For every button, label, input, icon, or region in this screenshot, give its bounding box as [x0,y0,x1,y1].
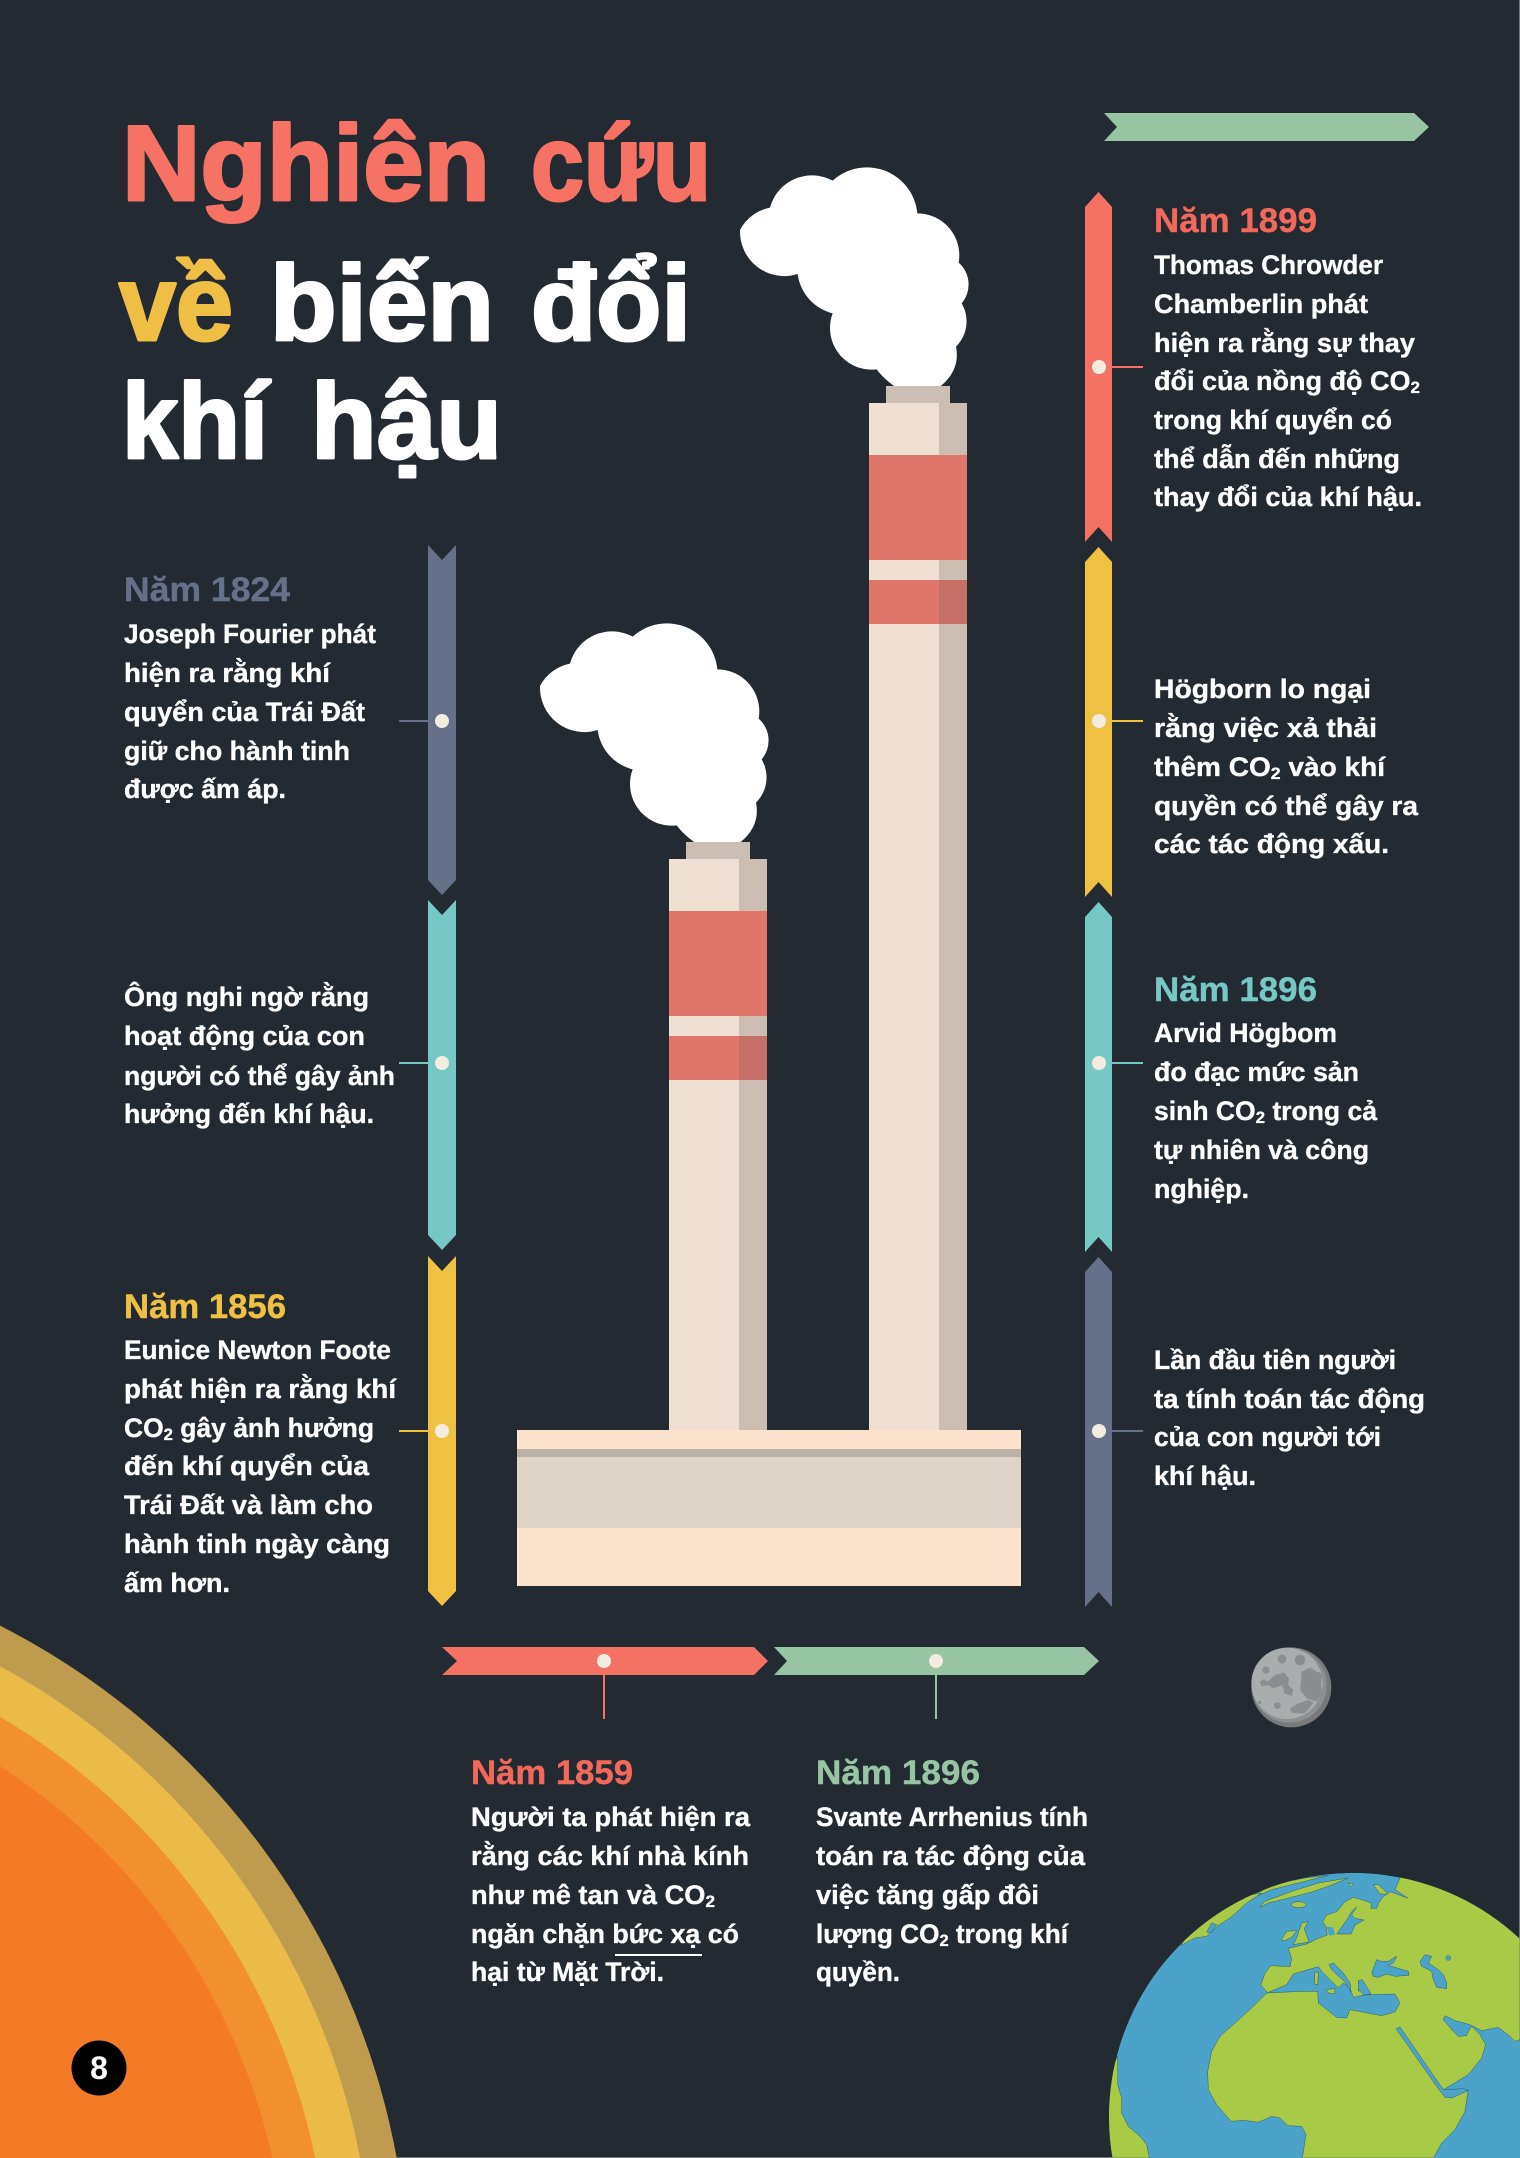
text block: ta tính toán tác động [1154,1384,1425,1414]
page number: 8 [90,2050,108,2086]
text block: rằng việc xả thải [1154,712,1377,743]
text block: thêm CO [1154,752,1267,782]
ribbon [1085,192,1112,542]
smoke: right chimney [740,167,969,387]
year heading: Năm 1824 [124,571,290,609]
title: Nghiên [122,103,490,223]
title: đổi [531,243,691,363]
text block: Joseph Fourier phát [124,619,376,649]
year heading: Năm 1899 [1154,202,1317,240]
connector [1112,1430,1143,1432]
text block: giữ cho hành tinh [124,736,350,766]
panel: 1859 [442,1647,768,1987]
year heading: Năm 1859 [471,1754,633,1792]
connector [935,1675,937,1719]
text block: 2 [1411,378,1420,397]
text block: đổi của nồng độ CO [1154,366,1410,396]
text block: Lần đầu tiên người [1154,1345,1396,1375]
dot [1092,1424,1106,1438]
text block [124,1335,398,1598]
text block: của con người tới [1154,1422,1381,1452]
title: hậu [311,361,502,481]
text block: 2 [164,1425,173,1444]
text block: Svante Arrhenius tính [816,1802,1088,1832]
text block: các tác động xấu. [1154,829,1389,859]
panel: human activity doubt [124,900,456,1250]
text block: hại từ Mặt Trời. [471,1957,664,1987]
text block: toán ra tác động của [816,1841,1086,1871]
title: khí [122,361,271,481]
connector [1112,1062,1143,1064]
text block: gây ảnh hưởng [173,1413,374,1443]
text block: việc tăng gấp đôi [816,1880,1039,1910]
text block: hoạt động của con [124,1021,365,1051]
icon: earth [1107,1870,1520,2158]
right chimney [869,386,967,1430]
text block: quyền. [816,1957,900,1987]
text block: Eunice Newton Foote [124,1335,391,1365]
left chimney [669,842,767,1430]
text block: thể dẫn đến những [1154,443,1400,474]
ribbon [428,900,456,1250]
text block: Người ta phát hiện ra [471,1802,751,1832]
panel: first calculation [1085,1257,1425,1607]
dot [597,1654,611,1668]
ribbon [1085,1257,1112,1607]
text block: Ông nghi ngờ rằng [124,981,369,1012]
dot [435,1424,449,1438]
ribbon [774,1647,1099,1675]
panel: 1824 [124,545,456,895]
text block: khí hậu. [1154,1461,1256,1491]
text block: ngăn chặn bức xạ có [471,1919,739,1949]
text block: 2 [939,1931,949,1950]
connector [399,720,428,722]
dot [435,1056,449,1070]
text block: CO [124,1413,164,1443]
text block: Arvid Högbom [1154,1018,1337,1048]
ribbon [428,1256,456,1606]
connector [603,1675,605,1719]
text block: 2 [1271,764,1281,783]
panel: 1896 Högbom [1085,902,1378,1252]
dot [929,1654,943,1668]
text block: trong khí [949,1919,1069,1949]
text block [1154,1018,1378,1204]
text block: hành tinh ngày càng [124,1529,390,1559]
title: về [119,243,233,363]
text block: hiện ra rằng sự thay [1154,327,1415,358]
connector [399,1430,428,1432]
text block: đến khí quyển của [124,1451,370,1481]
text block: trong khí quyển có [1154,405,1392,435]
title [119,103,711,481]
text block: như mê tan và CO [471,1880,704,1910]
panel: Högborn concern [1085,547,1419,897]
text block: vào khí [1281,752,1387,782]
text block: đo đạc mức sản [1154,1057,1359,1087]
smoke: left chimney [540,623,769,843]
text block: ấm hơn. [124,1568,230,1598]
text block: Chamberlin phát [1154,289,1368,319]
text block [1154,250,1422,512]
top ribbon [1104,113,1429,141]
text block: sinh CO [1154,1096,1258,1126]
connector [399,1062,428,1064]
text block [816,1802,1088,1987]
text block: Högborn lo ngại [1154,674,1371,704]
ribbon [1085,547,1112,897]
text block: 2 [705,1892,715,1911]
text block [124,619,376,804]
text block: thay đổi của khí hậu. [1154,482,1422,512]
ribbon [1085,902,1112,1252]
connector [1112,720,1143,722]
page number [72,2040,126,2096]
panel: 1899 [1085,192,1422,542]
icon: sun [0,1626,397,2158]
text block [1154,1345,1425,1491]
title: cứu [531,103,711,223]
text block: hưởng đến khí hậu. [124,1099,374,1129]
text block: Thomas Chrowder [1154,250,1383,280]
text block [124,981,395,1129]
text block: phát hiện ra rằng khí [124,1373,398,1404]
text block [1154,674,1419,859]
dot [1092,714,1106,728]
dot [1092,360,1106,374]
icon: moon [1251,1647,1331,1727]
text block: tự nhiên và công [1154,1135,1369,1165]
text block: 2 [1256,1108,1265,1127]
text block: trong cả [1265,1096,1378,1126]
panel: 1856 [124,1256,456,1606]
text block: hiện ra rằng khí [124,657,332,688]
dot [1092,1056,1106,1070]
text block [471,1802,751,1987]
year heading: Năm 1896 [1154,971,1317,1009]
ribbon [442,1647,768,1675]
text block: Trái Đất và làm cho [124,1490,373,1520]
text block: quyển của Trái Đất [124,697,365,727]
title: biến [270,243,494,363]
year heading: Năm 1896 [816,1754,980,1792]
underline: bức xạ [615,1954,702,1956]
dot [435,714,449,728]
text block: rằng các khí nhà kính [471,1840,749,1871]
connector [1112,366,1143,368]
factory base [517,1430,1021,1586]
text block: lượng CO [816,1919,943,1949]
text block: được ấm áp. [124,774,286,804]
year heading: Năm 1856 [124,1288,286,1326]
panel: 1896 Arrhenius [774,1647,1099,1987]
ribbon [428,545,456,895]
text block: quyền có thể gây ra [1154,791,1419,821]
text block: nghiệp. [1154,1174,1249,1204]
text block: người có thể gây ảnh [124,1061,395,1091]
